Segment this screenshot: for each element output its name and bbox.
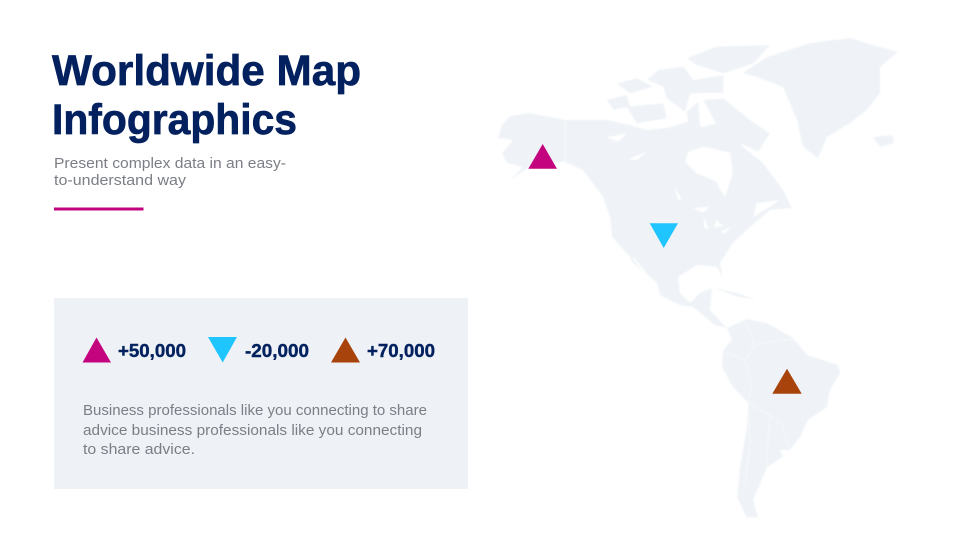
map: South America xyxy=(722,319,840,518)
legend: minus 20,000: -20,000 xyxy=(245,341,309,361)
panel background xyxy=(54,298,468,489)
subtitle: to-understand way xyxy=(54,172,187,189)
map: Greenland xyxy=(743,38,898,158)
map: Iceland xyxy=(873,135,894,147)
description text: Business professionals like you connecting to share xyxy=(83,402,427,419)
map: Arctic islands xyxy=(607,45,770,152)
map: Cuba and Caribbean xyxy=(715,288,757,300)
description text: advice business professionals like you connecting xyxy=(83,422,422,439)
legend: minus 20,000 xyxy=(208,337,309,362)
marker: Brazil up triangle xyxy=(772,369,802,394)
accent rule xyxy=(54,208,144,210)
panel: legend and description xyxy=(54,298,468,489)
map: country borders xyxy=(565,120,795,490)
legend: plus 50,000: +50,000 xyxy=(118,341,186,361)
world map: the Americas xyxy=(498,38,898,518)
subtitle: Present complex data in an easy- xyxy=(54,155,286,172)
title: Infographics xyxy=(52,96,297,144)
map: Baja California gulf xyxy=(633,258,652,285)
legend: plus 70,000: +70,000 xyxy=(367,341,435,361)
marker: USA down triangle xyxy=(650,223,678,248)
map: inland waters xyxy=(607,133,780,234)
title: Worldwide Map xyxy=(52,47,361,95)
marker: Alaska up triangle xyxy=(528,144,557,169)
legend: plus 70,000 xyxy=(331,338,435,362)
description text xyxy=(83,402,427,458)
map: North America xyxy=(498,38,898,328)
subtitle xyxy=(54,155,286,189)
description text: to share advice. xyxy=(83,441,195,458)
legend: plus 50,000 xyxy=(82,338,186,362)
title xyxy=(52,47,361,144)
